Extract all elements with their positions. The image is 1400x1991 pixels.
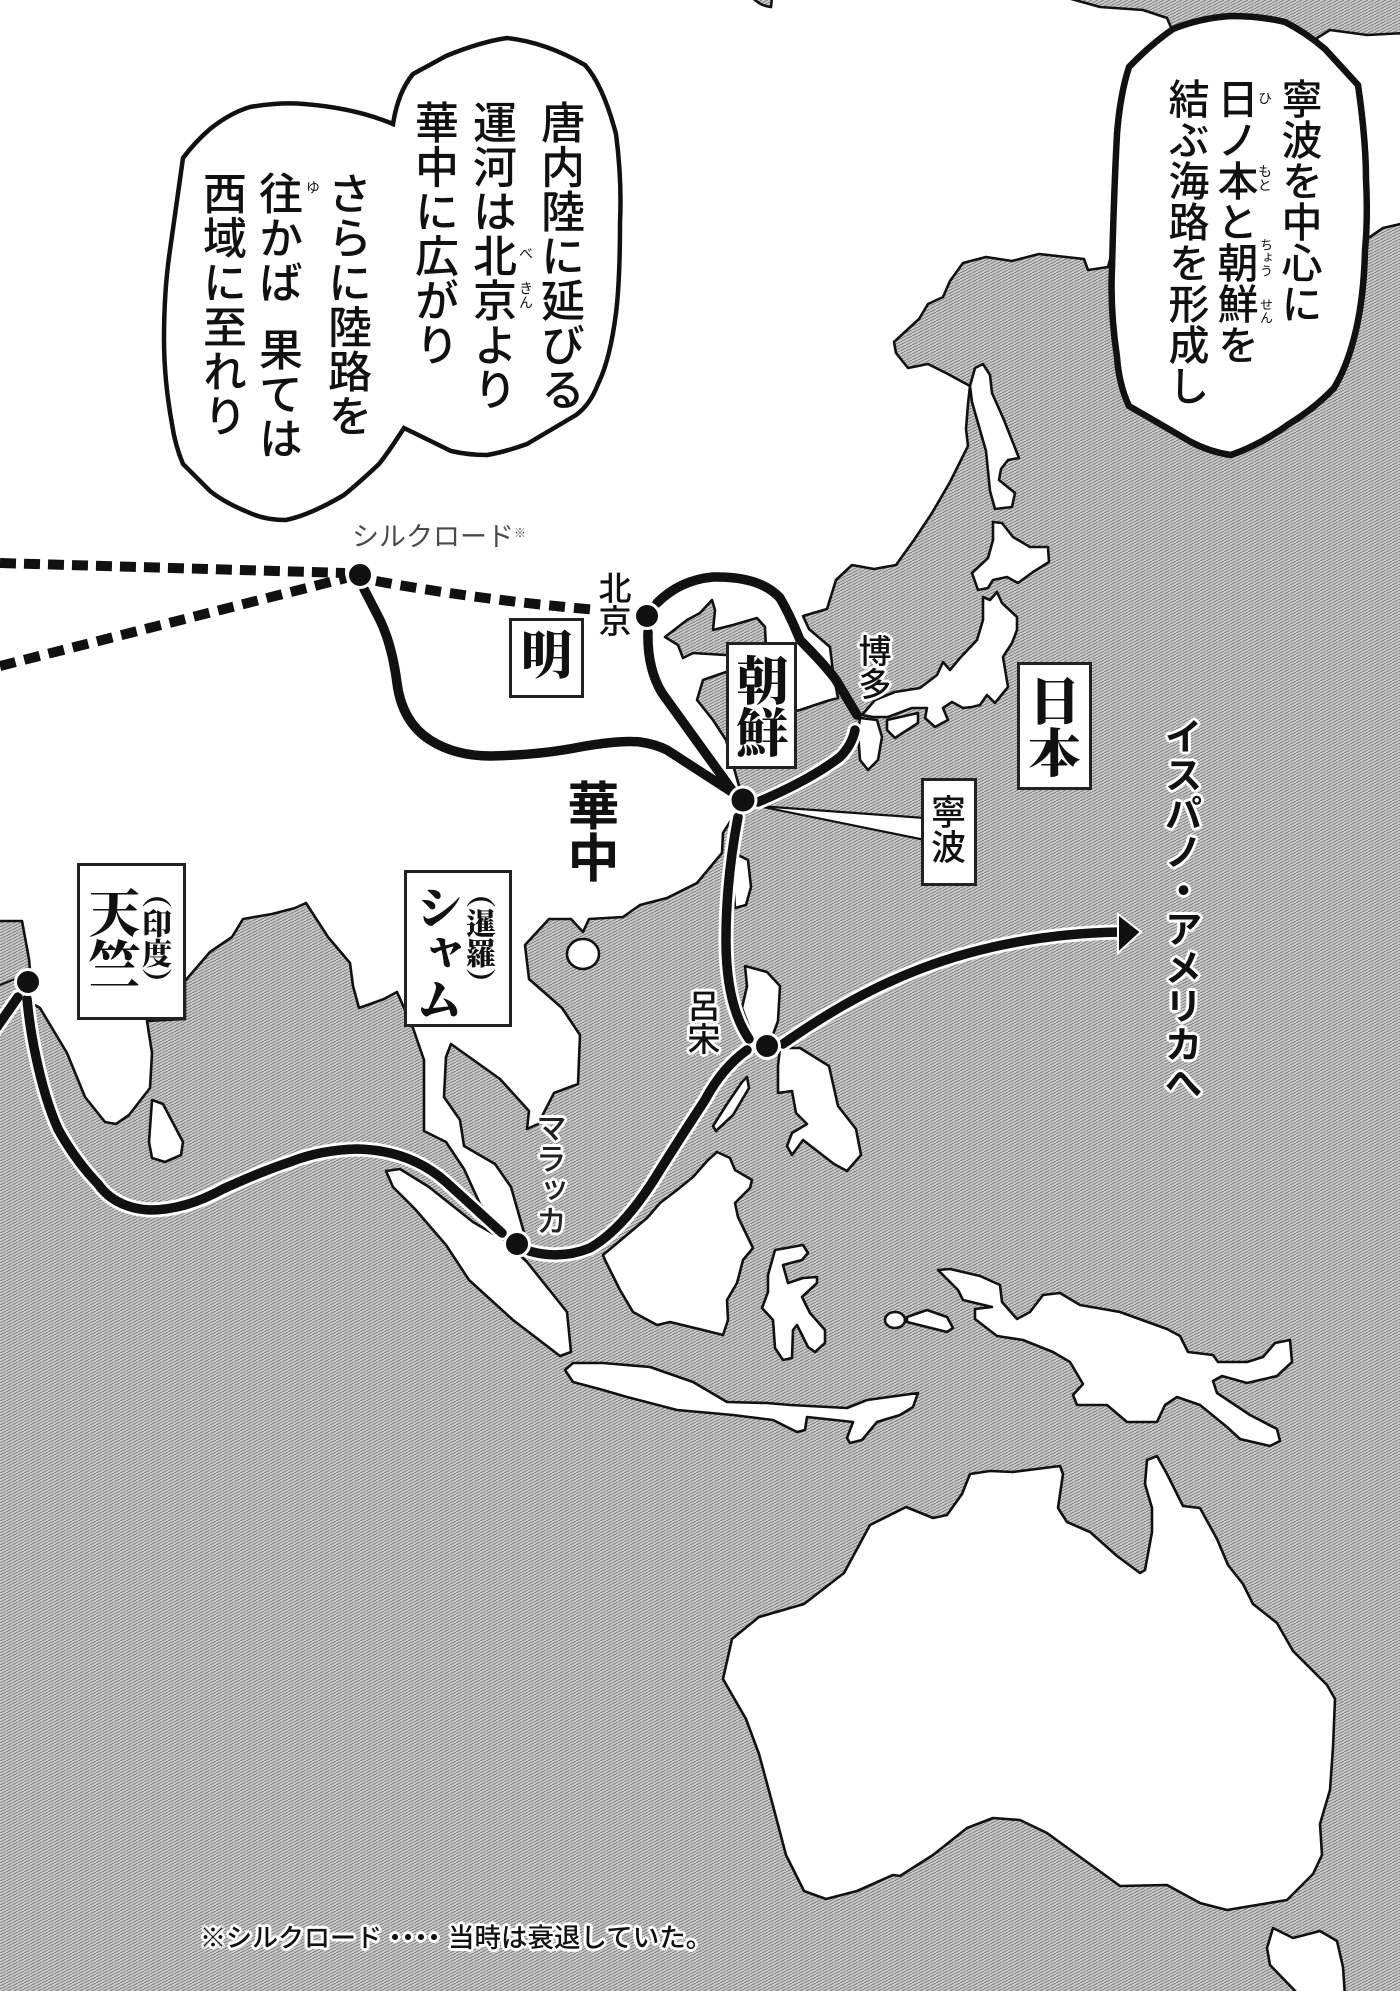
label box: Siam: シャム bbox=[410, 884, 461, 1022]
bubble text: left: 西域に至れり bbox=[196, 171, 245, 438]
label box: Japan: 日本 bbox=[1020, 674, 1077, 778]
route nodes bbox=[16, 562, 780, 1256]
label box: Korea: 朝鮮 bbox=[728, 654, 785, 758]
Hokkaido bbox=[972, 522, 1049, 590]
bubble text: right: 寧波を中心に bbox=[1275, 78, 1321, 324]
label: Luzon: 呂宋 bbox=[683, 989, 720, 1055]
node: Ningbo bbox=[730, 787, 756, 813]
label box: Ningbo: 寧波 bbox=[926, 794, 965, 864]
Mindanao bbox=[778, 1048, 861, 1171]
Hainan bbox=[567, 939, 599, 969]
label box: India: （印度） bbox=[137, 878, 170, 998]
label: Beijing: 北京 bbox=[594, 571, 631, 637]
Tasmania bbox=[1267, 1928, 1345, 1991]
bubble text: left: ゆ bbox=[305, 180, 321, 194]
Luzon bbox=[742, 966, 780, 1040]
label box: Japan bbox=[1017, 662, 1092, 790]
label: to Hispano America: イスパノ・アメリカへ bbox=[1158, 717, 1200, 1102]
arrowhead toward America bbox=[1118, 914, 1141, 953]
node: Luzon bbox=[754, 1034, 780, 1058]
Ningbo label pointer bbox=[758, 806, 925, 840]
silk road dashed routes bbox=[0, 563, 598, 666]
speech bubble right bbox=[1112, 16, 1367, 455]
Kyushu bbox=[858, 718, 882, 770]
label: Central China: 華中 bbox=[559, 779, 617, 883]
Palawan bbox=[713, 1077, 749, 1131]
bubble text: left: 運河は北京より bbox=[466, 100, 515, 412]
label box: Siam: （暹羅） bbox=[461, 878, 494, 998]
Moluccas bbox=[885, 1310, 953, 1332]
node: Beijing bbox=[634, 604, 660, 628]
label box: Siam bbox=[404, 870, 512, 1027]
footnote: ※シルクロード・・・・ 当時は衰退していた。 bbox=[200, 1923, 712, 1953]
Taiwan bbox=[733, 855, 751, 908]
bubble text: left: 往かば 果ては bbox=[252, 171, 301, 460]
label box: Ming bbox=[509, 618, 584, 698]
label box: India bbox=[77, 863, 186, 1020]
bubble text: right: ひ bbox=[1257, 91, 1273, 105]
Sulawesi bbox=[762, 1245, 825, 1360]
bubble text: right: せん bbox=[1258, 298, 1273, 324]
solid trade routes bbox=[0, 577, 1120, 1255]
label box: India: 天竺 bbox=[80, 886, 137, 990]
node: Malacca bbox=[504, 1232, 530, 1256]
label: Malacca: マラッカ bbox=[531, 1112, 566, 1236]
bubble text: left: きん bbox=[518, 281, 534, 309]
bubble text: right: ちょう bbox=[1258, 238, 1273, 277]
Bohai sea bbox=[665, 600, 766, 658]
sea routes white halo bbox=[0, 730, 1120, 1255]
node: India bbox=[16, 970, 40, 994]
bubble text: left: べ bbox=[518, 246, 534, 260]
Sakhalin bbox=[970, 364, 1019, 509]
label box: Korea bbox=[726, 642, 797, 769]
speech bubble left bbox=[164, 38, 620, 520]
top edge islet bbox=[752, 0, 772, 7]
bubble text: left: 華中に広がり bbox=[408, 100, 457, 367]
Australia bbox=[723, 1456, 1335, 1910]
Sumatra bbox=[386, 1169, 571, 1356]
node: silk road bbox=[348, 562, 372, 588]
bubble text: right: もと bbox=[1257, 164, 1273, 192]
islands bbox=[149, 364, 1345, 1991]
label box: Ming: 明 bbox=[520, 629, 572, 686]
Sri Lanka bbox=[149, 1100, 183, 1162]
Honshu bbox=[862, 592, 1017, 727]
Java and Lesser Sunda bbox=[565, 1363, 918, 1443]
bubble text: right: 結ぶ海路を形成し bbox=[1162, 78, 1208, 406]
bubble text: left: 唐内陸に延びる bbox=[534, 100, 583, 412]
label: silk road: シルクロード※ bbox=[352, 522, 526, 552]
bubble text: right bbox=[1162, 78, 1322, 406]
label: Hakata: 博多 bbox=[854, 634, 891, 700]
bubble text: left bbox=[196, 100, 584, 460]
bubble text: right: 日ノ本と朝鮮を bbox=[1211, 78, 1257, 365]
label box: Ningbo bbox=[921, 778, 977, 886]
Shikoku bbox=[887, 713, 918, 738]
New Guinea bbox=[938, 1269, 1292, 1446]
bubble text: left: さらに陸路を bbox=[321, 171, 370, 438]
Borneo bbox=[603, 1152, 753, 1335]
